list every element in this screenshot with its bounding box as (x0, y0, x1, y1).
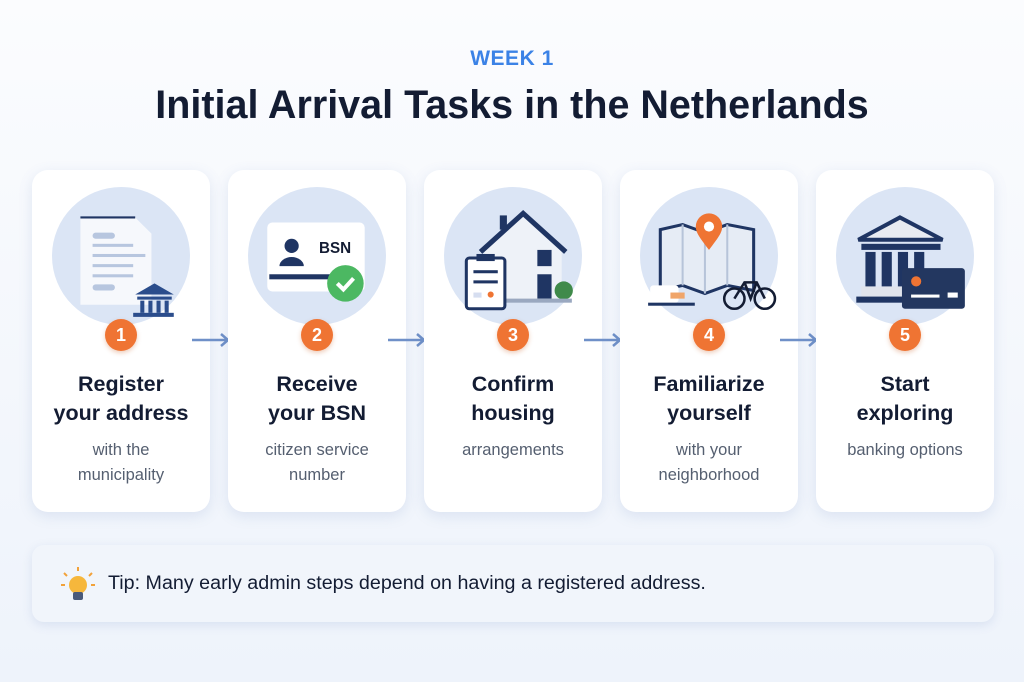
heading: yourself (667, 401, 751, 425)
description: with the (93, 441, 149, 459)
card 5: banking: 5 (900, 325, 910, 345)
card 2: BSN (228, 170, 406, 512)
description: municipality (78, 466, 164, 484)
heading: exploring (857, 401, 953, 425)
icon: house with clipboard (444, 187, 582, 325)
icon: document with building (52, 187, 190, 325)
heading: housing (471, 401, 555, 425)
tip box (32, 545, 994, 622)
heading: your BSN (268, 401, 366, 425)
arrow 1 (192, 333, 228, 347)
card 2: BSN: 2 (312, 325, 322, 345)
description (78, 441, 164, 484)
badge 1 (105, 319, 137, 351)
arrow 2 (388, 333, 424, 347)
heading: your address (53, 401, 189, 425)
arrow 4 (780, 333, 816, 347)
description (265, 441, 369, 484)
description: arrangements (462, 441, 564, 459)
heading (857, 372, 953, 425)
card 1: register address (32, 170, 210, 512)
card 3: housing (424, 170, 602, 512)
label: week 1: WEEK 1 (470, 47, 554, 70)
icon: ID card (248, 187, 386, 325)
description: neighborhood (659, 466, 759, 484)
card 5: banking (816, 170, 994, 512)
description: banking options (847, 441, 963, 459)
description (659, 441, 759, 484)
heading: Start (880, 372, 929, 396)
heading: Register (78, 372, 164, 396)
card 3: housing: 3 (508, 325, 518, 345)
heading: Familiarize (653, 372, 765, 396)
heading: Receive (276, 372, 358, 396)
heading (471, 372, 555, 425)
icon: map with pin and bike (640, 187, 778, 325)
description: number (289, 466, 345, 484)
arrow 3 (584, 333, 620, 347)
heading: Confirm (472, 372, 554, 396)
title: Initial Arrival Tasks in the Netherlands (155, 83, 869, 127)
card 4: neighborhood (620, 170, 798, 512)
icon: bank and card (836, 187, 974, 325)
heading (268, 372, 366, 425)
tip text: Tip: Many early admin steps depend on having a registered address. (108, 572, 706, 594)
heading (53, 372, 189, 425)
description: with your (676, 441, 742, 459)
badge 1: 1 (116, 325, 126, 345)
icon: light bulb (61, 567, 95, 600)
card 4: neighborhood: 4 (704, 325, 714, 345)
heading (653, 372, 765, 425)
icon: ID card: BSN (319, 240, 351, 257)
description: citizen service (265, 441, 369, 459)
